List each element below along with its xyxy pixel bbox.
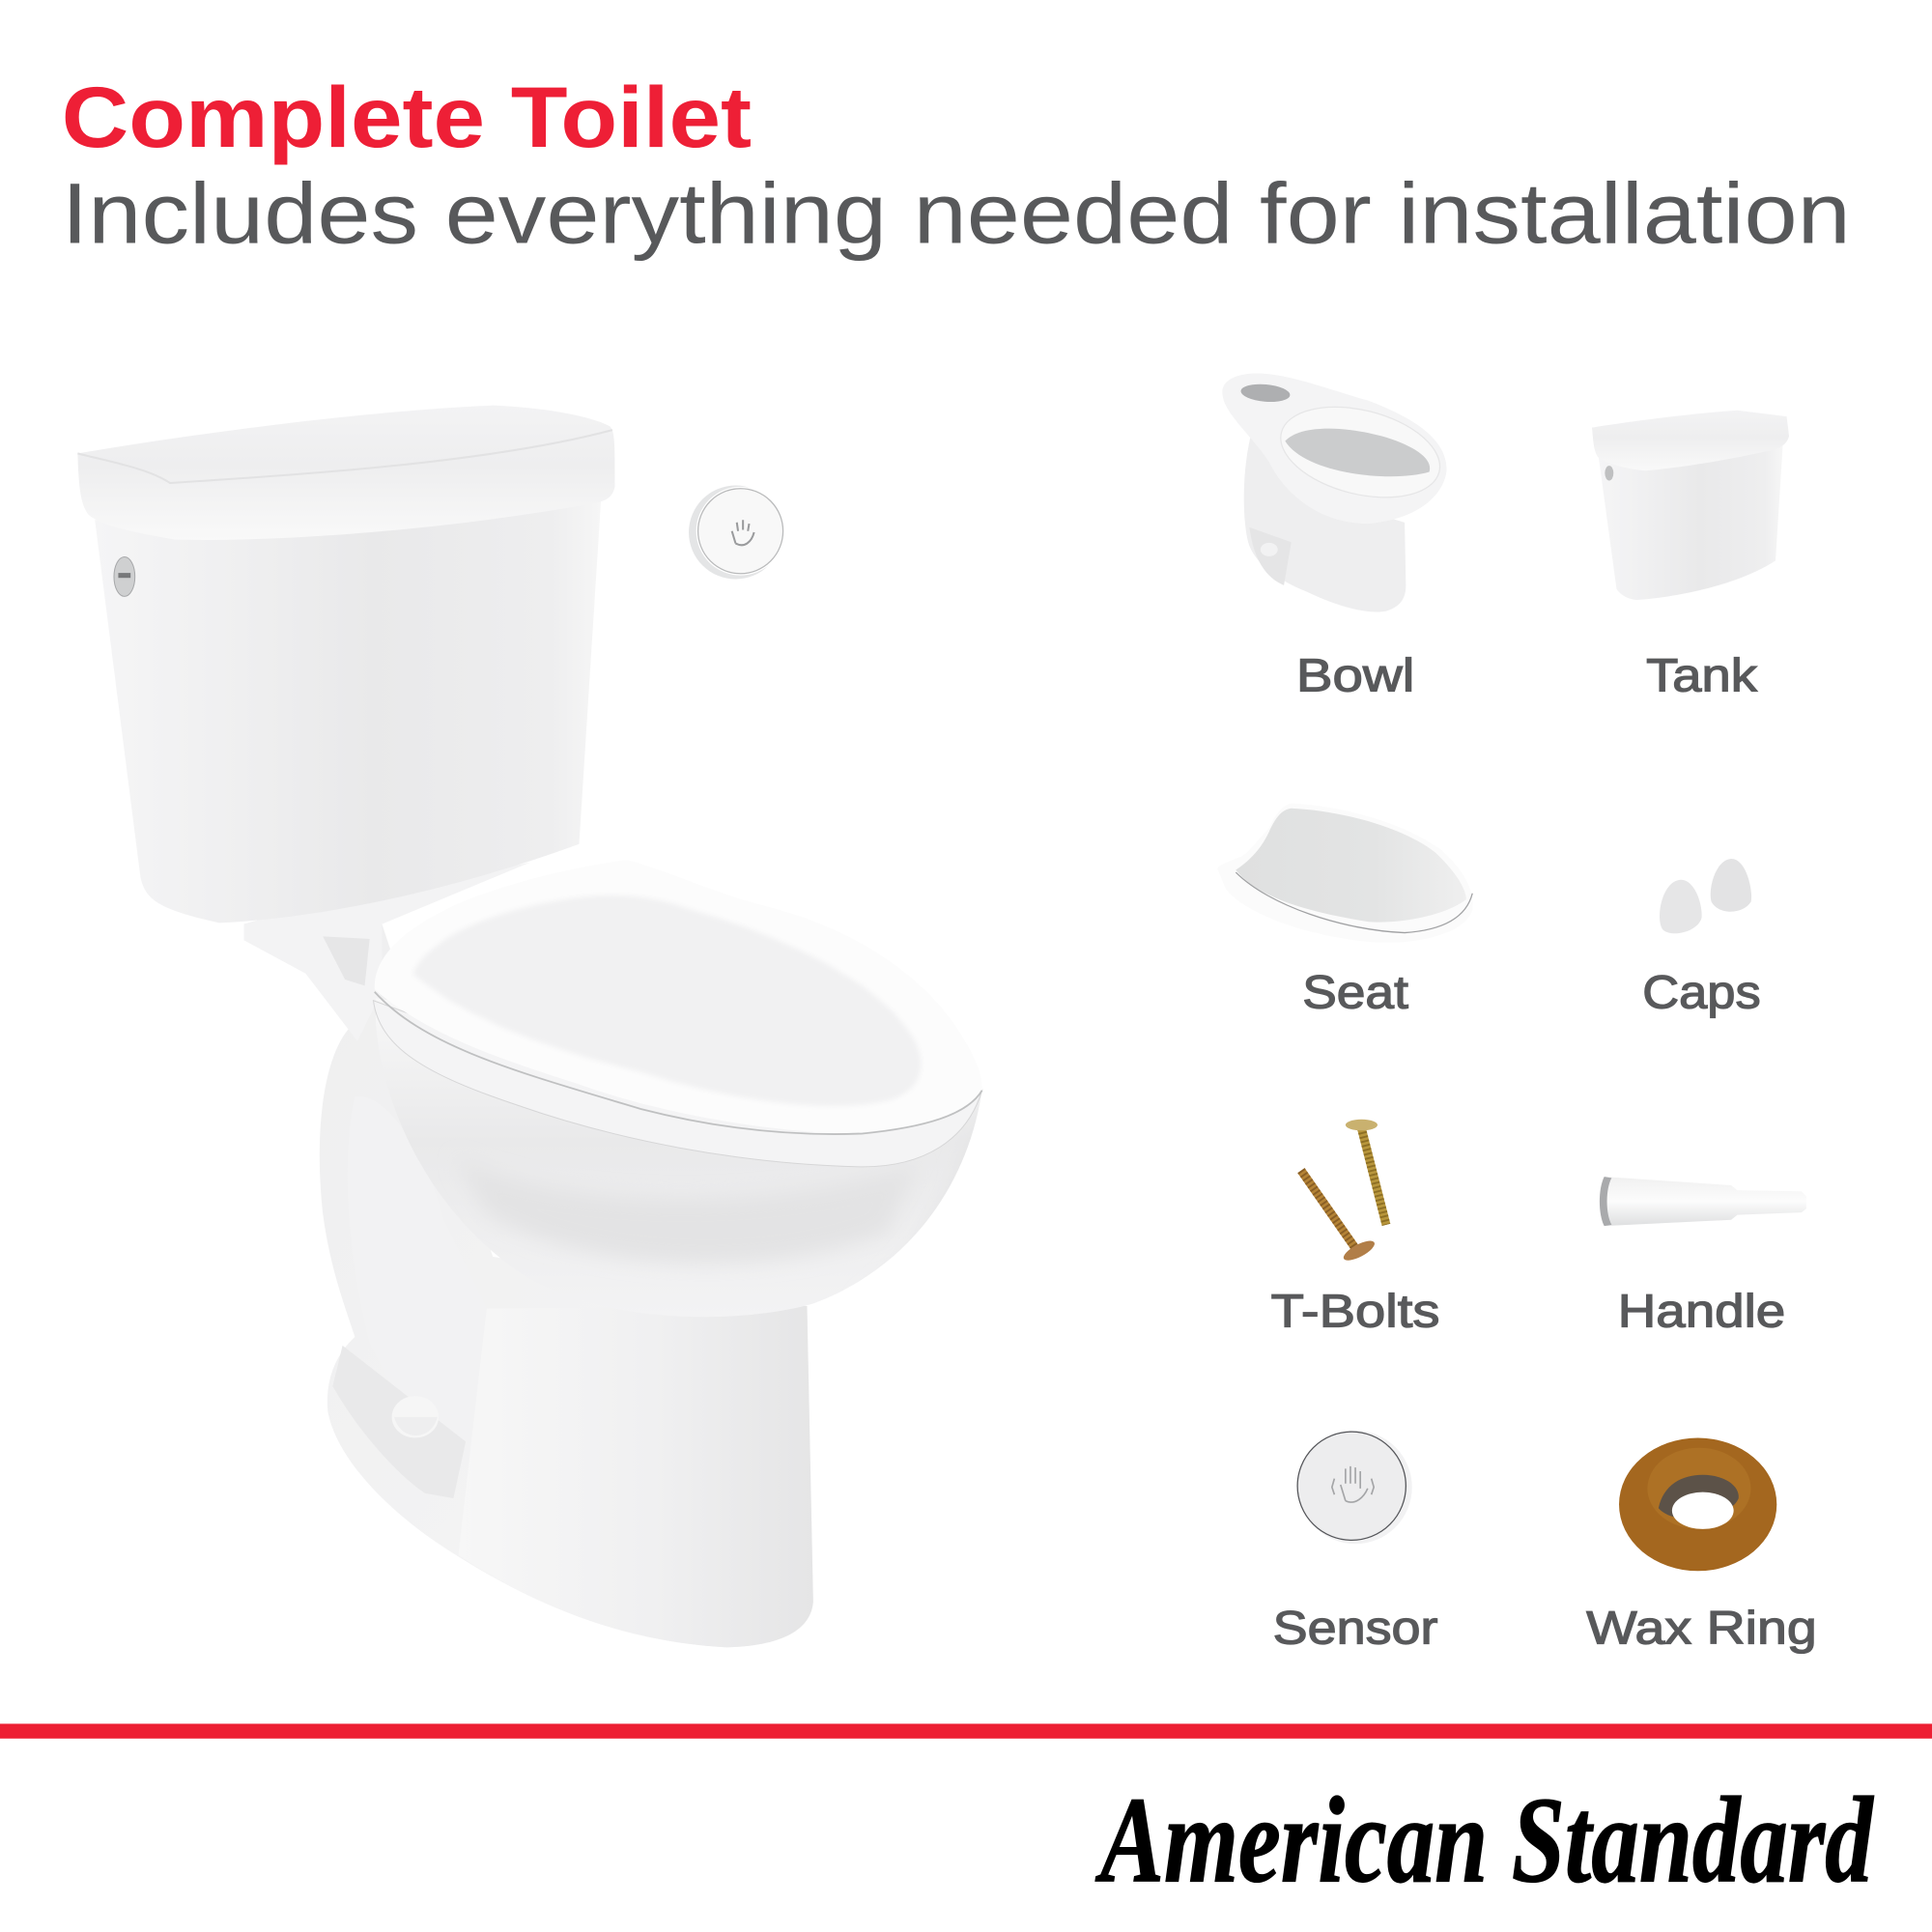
part: tank xyxy=(1592,411,1789,702)
label: Caps: Caps xyxy=(1642,966,1761,1018)
title: Complete Toilet: Complete Toilet xyxy=(62,69,752,165)
part: t-bolts xyxy=(1271,1120,1439,1338)
caps image xyxy=(1660,859,1751,933)
tank lid ridge xyxy=(77,430,612,483)
seat ring under lid xyxy=(373,1001,982,1167)
part: caps xyxy=(1642,859,1761,1018)
bowl shading xyxy=(487,1188,894,1260)
heading xyxy=(62,69,1851,261)
label: Bowl: Bowl xyxy=(1296,650,1414,702)
main product: complete toilet xyxy=(77,406,985,1647)
toilet bowl xyxy=(376,998,982,1317)
flush handle xyxy=(114,557,135,596)
part: wax ring xyxy=(1586,1438,1817,1655)
part: handle xyxy=(1600,1177,1806,1338)
label: T-Bolts: T-Bolts xyxy=(1271,1286,1439,1338)
part: sensor xyxy=(1273,1431,1438,1655)
toilet base and trapway xyxy=(244,863,813,1647)
handle image xyxy=(1600,1177,1806,1226)
red divider bar xyxy=(0,1723,1932,1739)
bowl image xyxy=(1222,373,1449,612)
toilet tank body xyxy=(95,496,601,923)
seat image xyxy=(1217,804,1473,943)
t-bolts image xyxy=(1301,1120,1386,1264)
label: Sensor: Sensor xyxy=(1273,1603,1438,1655)
tank lid xyxy=(77,406,614,540)
part: seat xyxy=(1217,804,1473,1018)
label: Handle: Handle xyxy=(1618,1286,1785,1338)
toilet seat lid xyxy=(375,860,982,1134)
sensor image xyxy=(1297,1431,1412,1544)
label: Tank: Tank xyxy=(1646,650,1758,702)
subtitle: Includes everything needed for installation xyxy=(62,164,1851,261)
label: Seat: Seat xyxy=(1302,966,1408,1018)
wax ring image xyxy=(1619,1438,1776,1571)
touchless sensor (small) xyxy=(689,486,784,579)
part: bowl xyxy=(1222,373,1449,702)
tank image xyxy=(1592,411,1789,600)
parts grid xyxy=(1217,373,1817,1655)
label: Wax Ring: Wax Ring xyxy=(1586,1603,1817,1655)
